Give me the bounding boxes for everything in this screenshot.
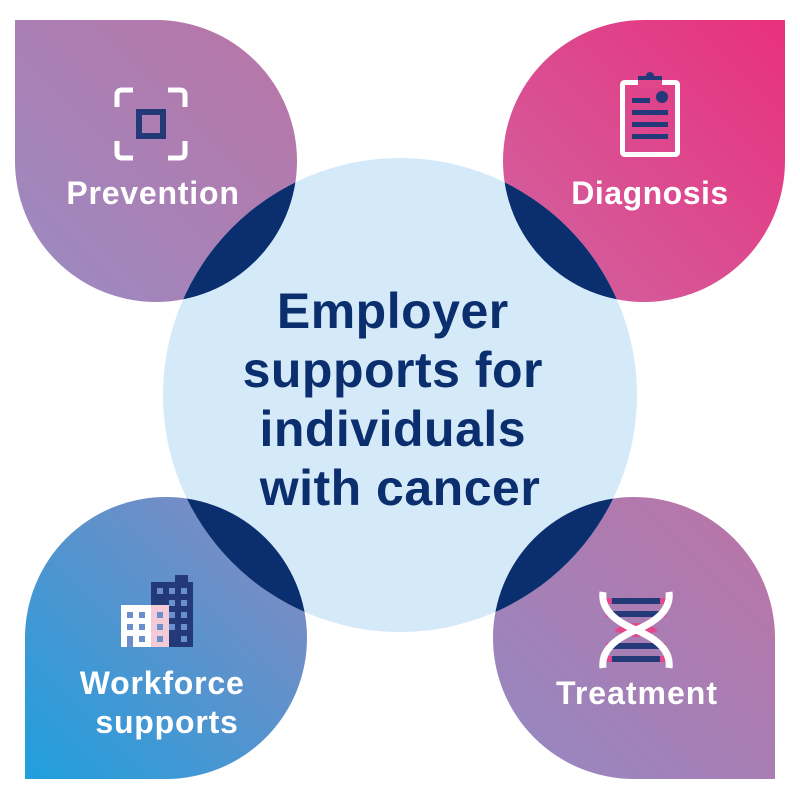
panel: diagnosis [503, 20, 785, 302]
panel: prevention [15, 20, 297, 302]
panel: treatment [493, 497, 775, 779]
label: Treatment: Treatment [556, 675, 718, 711]
title: with cancer [259, 460, 540, 516]
overlaps [183, 182, 617, 612]
icon: prevention frame [117, 90, 185, 158]
icon: clipboard [622, 72, 678, 154]
center circle [163, 158, 637, 632]
label: Workforce supports: supports [95, 704, 239, 740]
title: individuals [259, 401, 526, 457]
label: Prevention: Prevention [66, 175, 240, 211]
title: Employer [277, 283, 509, 339]
label: Workforce supports: Workforce [80, 665, 245, 701]
icon: buildings [121, 575, 193, 647]
panel: workforce supports [25, 497, 307, 779]
title: supports for [243, 342, 543, 398]
icon: DNA [603, 592, 669, 668]
label: Diagnosis: Diagnosis [571, 175, 729, 211]
